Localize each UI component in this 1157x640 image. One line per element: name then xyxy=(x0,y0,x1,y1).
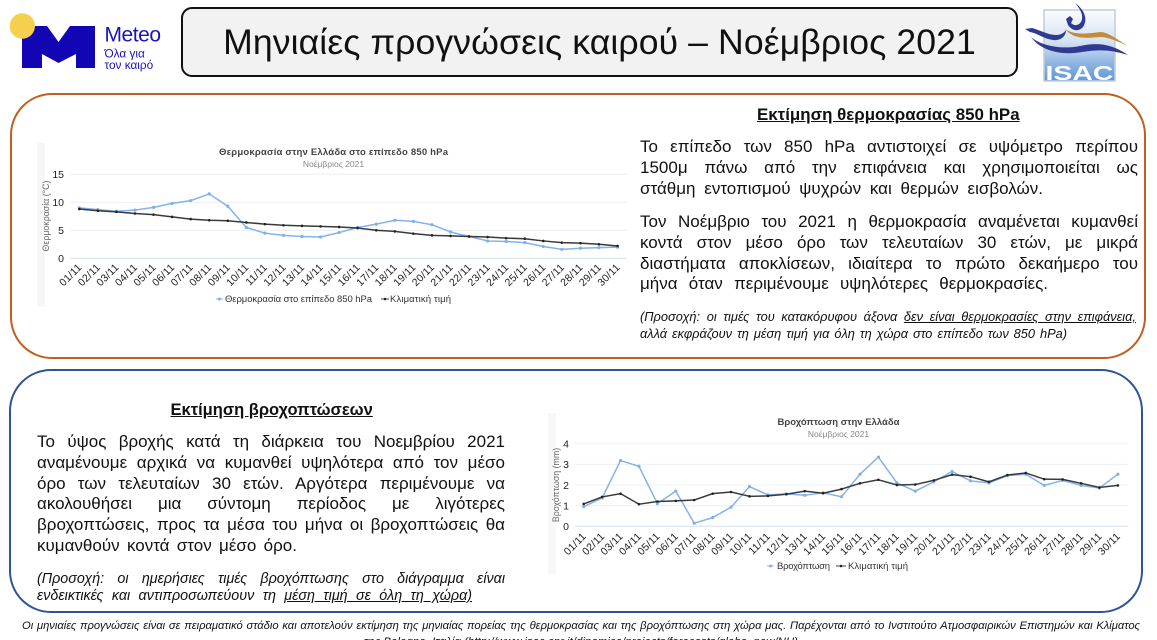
y axis title: Θερμοκρασία (°C) xyxy=(41,181,51,251)
x axis labels: 28/11 xyxy=(558,262,586,289)
series: forecast temperature xyxy=(79,194,618,249)
footer note xyxy=(22,620,1140,640)
text block: rainfall outlook: Το ύψος βροχής κατά τη διάρκεια του Νοεμβρίου 2021 xyxy=(37,432,505,451)
x axis labels xyxy=(562,531,1123,558)
x axis labels: 14/11 xyxy=(801,531,828,558)
x axis labels: 05/11 xyxy=(635,531,663,558)
x axis labels: 22/11 xyxy=(948,531,976,558)
y axis labels: 5 xyxy=(58,225,64,237)
x axis labels: 29/11 xyxy=(1077,531,1105,558)
line chart: rainfall xyxy=(551,417,1128,572)
note: temperature axis xyxy=(640,309,1136,340)
y axis labels: 1 xyxy=(563,500,569,512)
legend xyxy=(767,561,908,572)
x axis labels: 01/11 xyxy=(562,531,589,558)
logo swooshes xyxy=(1025,3,1128,55)
text block: November outlook: διαστήματα αποκλίσεων, ιδιαίτερα το πρώτο δεκαήμερο του xyxy=(640,254,1138,273)
legend: Θερμοκρασία στο επίπεδο 850 hPa xyxy=(225,294,373,305)
logo: Meteo xyxy=(10,13,161,72)
x axis labels: 10/11 xyxy=(224,262,251,289)
x axis labels: 06/11 xyxy=(654,531,681,558)
x axis labels: 20/11 xyxy=(410,262,437,289)
x axis labels: 08/11 xyxy=(690,531,718,558)
text block: November outlook: μήνα όταν περιμένουμε υψηλότερες θερμοκρασίες. xyxy=(640,274,1048,293)
x axis labels: 23/11 xyxy=(967,531,994,558)
x axis labels: 25/11 xyxy=(503,262,530,289)
legend: Βροχόπτωση xyxy=(777,561,830,572)
x axis labels: 28/11 xyxy=(1059,531,1086,558)
y axis labels xyxy=(52,169,64,265)
x axis labels: 16/11 xyxy=(838,531,865,558)
panel: temperature estimate xyxy=(10,93,1146,359)
text block: 850 hPa explanation: Το επίπεδο των 850 hPa αντιστοιχεί σε υψόμετρο περίπου xyxy=(640,137,1138,156)
y axis labels: 2 xyxy=(563,480,569,492)
logo background square xyxy=(1044,10,1115,81)
x axis labels: 03/11 xyxy=(94,262,122,289)
y axis title: Βροχόπτωση (mm) xyxy=(551,448,561,522)
legend: Κλιματική τιμή xyxy=(848,561,908,572)
series: climatology temperature xyxy=(79,209,618,246)
x axis labels: 03/11 xyxy=(598,531,626,558)
note: temperature axis: αλλά εκφράζουν τη μέση τιμή για όλη τη χώρα στο επίπεδο των 850 hPa) xyxy=(640,326,1067,340)
text block: rainfall outlook: ακολουθήσει μια σύντομη περίοδος με λιγότερες xyxy=(37,494,505,513)
text block: rainfall outlook xyxy=(37,432,505,555)
x axis labels: 26/11 xyxy=(1022,531,1049,558)
x axis labels: 12/11 xyxy=(764,531,791,558)
x axis labels: 30/11 xyxy=(595,262,623,289)
x axis labels: 21/11 xyxy=(930,531,957,558)
chart subtitle: Νοέμβριος 2021 xyxy=(808,429,869,439)
x axis labels: 07/11 xyxy=(169,262,196,289)
panel: rainfall estimate xyxy=(9,369,1143,613)
x axis labels: 27/11 xyxy=(1040,531,1068,558)
icon: navy M xyxy=(22,26,95,68)
x axis labels: 30/11 xyxy=(1096,531,1123,558)
y axis labels: 0 xyxy=(563,521,569,533)
x axis labels: 15/11 xyxy=(317,262,344,289)
x axis labels: 24/11 xyxy=(985,531,1013,558)
logo ISAC text: ISAC xyxy=(1046,63,1114,85)
text block: November outlook: κοντά στον μέσο όρο των τελευταίων 30 ετών, με μικρά xyxy=(640,233,1138,252)
x axis labels xyxy=(57,262,623,289)
x axis labels: 19/11 xyxy=(391,262,419,289)
x axis labels: 17/11 xyxy=(354,262,381,289)
y axis labels: 4 xyxy=(563,438,569,450)
text block: rainfall outlook: αναμένουμε αρχικά να κυμανθεί υψηλότερα από τον μέσο xyxy=(37,453,505,472)
x axis labels: 29/11 xyxy=(577,262,604,289)
note: rainfall values: ενδεικτικές και αντιπροσωπεύουν τη μέση τιμή σε όλη τη χώρα) xyxy=(37,588,472,604)
series: climatology rainfall xyxy=(584,473,1118,504)
legend: Κλιματική τιμή xyxy=(390,294,451,305)
chart subtitle: Νοέμβριος 2021 xyxy=(303,159,364,169)
y axis labels: 0 xyxy=(58,253,64,265)
x axis labels: 20/11 xyxy=(912,531,939,558)
x axis labels: 23/11 xyxy=(465,262,493,289)
series: forecast rainfall xyxy=(584,457,1118,523)
x axis labels: 11/11 xyxy=(746,531,773,557)
heading: rainfall: Εκτίμηση βροχοπτώσεων xyxy=(170,401,373,419)
text block: rainfall outlook: κυμανθούν κοντά στον μέσο όρο. xyxy=(37,536,297,555)
line chart: temperature xyxy=(41,147,627,305)
x axis labels: 22/11 xyxy=(447,262,474,289)
y axis labels: 10 xyxy=(52,197,64,209)
x axis labels: 18/11 xyxy=(875,531,902,558)
logo tagline: Όλα για xyxy=(104,46,145,60)
text block: 850 hPa explanation: στάθμη εντοπισμού ψυχρών και θερμών εισβολών. xyxy=(640,179,1043,198)
x axis labels: 24/11 xyxy=(484,262,511,289)
x axis labels: 27/11 xyxy=(540,262,567,289)
x axis labels: 09/11 xyxy=(206,262,233,289)
note: rainfall values xyxy=(37,571,505,604)
logo: ISAC xyxy=(1025,3,1128,85)
x axis labels: 04/11 xyxy=(113,262,140,289)
footer note: Οι μηνιαίες προγνώσεις είναι σε πειραματικό στάδιο και αποτελούν εκτίμηση της μηνιαίας πορείας της θερμοκρασίας και της βροχόπτωσης στη χώρα μας. Παρέχονται από το Ινστιτούτο Ατμοσφαιρικών Επιστημών και Κλίματος xyxy=(22,620,1140,632)
y axis labels: 15 xyxy=(52,169,64,181)
icon: yellow sun xyxy=(10,13,35,39)
title banner: Μηνιαίες προγνώσεις καιρού – Νοέμβριος 2021 xyxy=(223,22,976,62)
x axis labels: 02/11 xyxy=(76,262,103,289)
x axis labels: 02/11 xyxy=(580,531,607,558)
text block: 850 hPa explanation xyxy=(640,137,1138,198)
x axis labels: 16/11 xyxy=(336,262,363,289)
logo tagline xyxy=(104,46,154,72)
x axis labels: 21/11 xyxy=(428,262,456,289)
x axis labels: 05/11 xyxy=(131,262,159,289)
y axis labels: 3 xyxy=(563,459,569,471)
logo wordmark: Meteo xyxy=(104,24,161,46)
x axis labels: 12/11 xyxy=(261,262,289,289)
logo tagline: τον καιρό xyxy=(104,58,154,72)
x axis labels: 17/11 xyxy=(856,531,884,558)
x axis labels: 08/11 xyxy=(187,262,214,289)
x axis labels: 25/11 xyxy=(1004,531,1031,558)
x axis labels: 15/11 xyxy=(819,531,847,558)
text block: rainfall outlook: βροχοπτώσεις, προς τα μέσα του μήνα οι βροχοπτώσεις θα xyxy=(37,515,505,534)
x axis labels: 04/11 xyxy=(617,531,644,558)
heading: temperature: Εκτίμηση θερμοκρασίας 850 hPa xyxy=(757,105,1020,124)
x axis labels: 11/11 xyxy=(243,262,270,288)
title banner xyxy=(181,7,1018,77)
text block: rainfall outlook: όρο των τελευταίων 30 ετών. Αργότερα περιμένουμε να xyxy=(37,474,505,493)
x axis labels: 09/11 xyxy=(709,531,736,558)
note: rainfall values: (Προσοχή: οι ημερήσιες τιμές βροχόπτωσης στο διάγραμμα είναι xyxy=(37,571,505,587)
legend xyxy=(216,294,451,305)
chart title: Θερμοκρασία στην Ελλάδα στο επίπεδο 850 hPa xyxy=(219,147,449,158)
x axis labels: 06/11 xyxy=(150,262,177,289)
x axis labels: 14/11 xyxy=(298,262,326,289)
note: temperature axis: (Προσοχή: οι τιμές του κατακόρυφου άξονα δεν είναι θερμοκρασίες στην επιφάνεια, xyxy=(640,309,1136,324)
x axis labels: 13/11 xyxy=(783,531,810,558)
x axis labels: 19/11 xyxy=(893,531,920,558)
y axis labels xyxy=(563,438,569,533)
x axis labels: 01/11 xyxy=(57,262,84,289)
x axis labels: 10/11 xyxy=(727,531,755,558)
text block: November outlook: Τον Νοέμβριο του 2021 η θερμοκρασία αναμένεται κυμανθεί xyxy=(640,212,1138,231)
x axis labels: 26/11 xyxy=(521,262,548,289)
x axis labels: 07/11 xyxy=(672,531,699,558)
x axis labels: 18/11 xyxy=(373,262,400,289)
text block: November outlook xyxy=(640,212,1138,293)
x axis labels: 13/11 xyxy=(280,262,307,289)
text block: 850 hPa explanation: 1500μ πάνω από την επιφάνεια και χρησιμοποιείται ως xyxy=(640,158,1138,177)
chart title: Βροχόπτωση στην Ελλάδα xyxy=(778,417,900,428)
